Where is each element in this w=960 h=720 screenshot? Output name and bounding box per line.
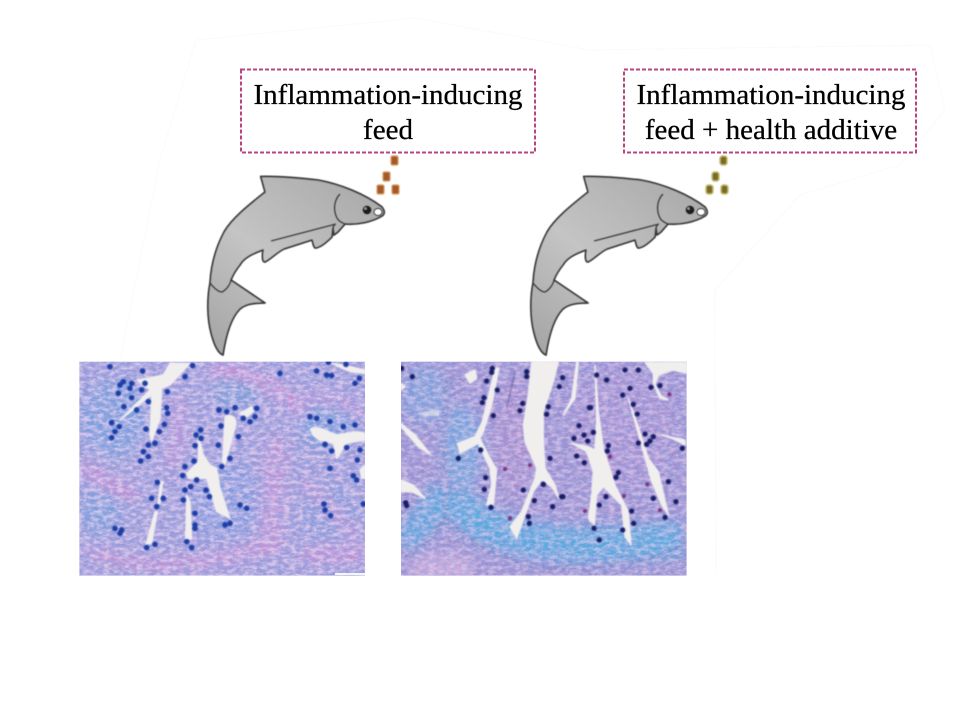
label box: inflammation-inducing feed: Inflammation-inducing — [254, 79, 522, 111]
icon: fish, control diet — [208, 176, 384, 355]
icon: feed pellets, plain — [377, 156, 399, 194]
label box: inflammation-inducing feed: feed — [363, 114, 413, 146]
label box: inflammation-inducing feed — [241, 70, 535, 152]
icon: fish, additive diet — [531, 176, 707, 355]
histology image: inflamed gut folds, many goblet cells — [79, 362, 365, 576]
histology image: healthy gut folds, fewer goblet cells — [401, 362, 687, 583]
label box: inflammation-inducing feed + health additive — [624, 70, 916, 152]
infographic canvas — [79, 68, 917, 576]
label box: inflammation-inducing feed + health additive: feed + health additive — [645, 114, 897, 146]
label box: inflammation-inducing feed + health additive: Inflammation-inducing — [636, 79, 906, 111]
icon: feed pellets, with additive — [706, 156, 728, 194]
